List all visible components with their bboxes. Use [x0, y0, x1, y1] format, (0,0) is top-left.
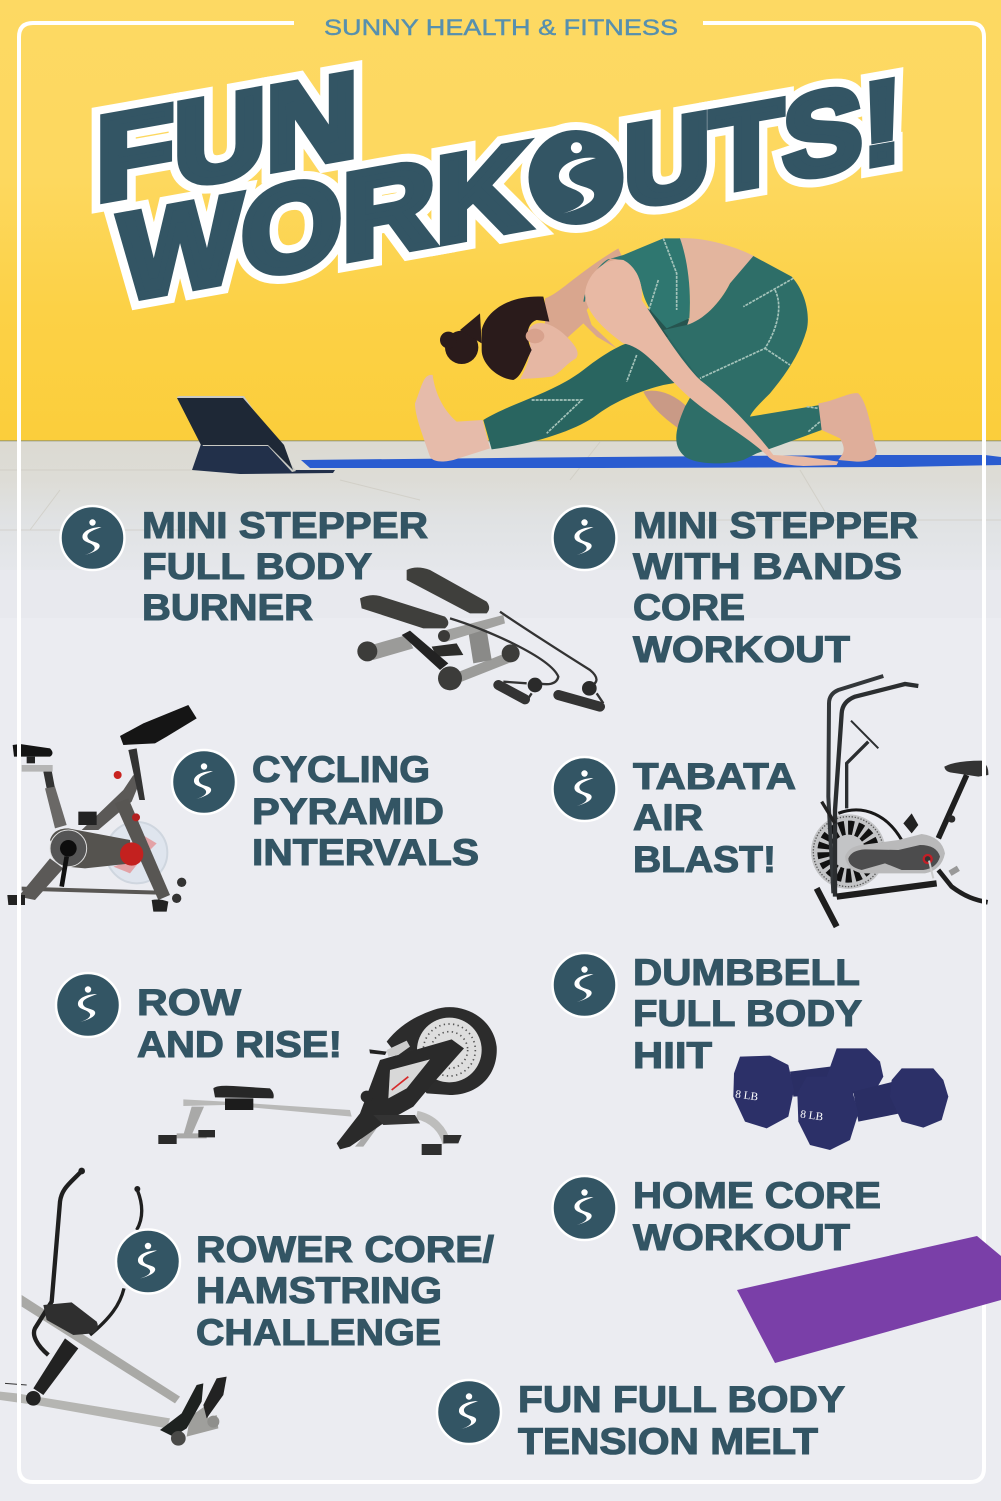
label: PYRAMID — [252, 791, 444, 832]
label: AND RISE! — [137, 1024, 342, 1065]
feet — [7, 895, 25, 905]
item: home core workout — [552, 1175, 881, 1258]
frame — [363, 635, 413, 660]
label: HOME CORE — [633, 1175, 881, 1216]
brand heading: SUNNY HEALTH & FITNESS — [324, 15, 678, 40]
feet — [357, 641, 377, 661]
icon: tablet on stand — [177, 396, 335, 474]
equipment: dumbbells: 8 LB — [799, 1108, 824, 1123]
handles — [828, 676, 883, 893]
icon: logo — [437, 1380, 501, 1444]
title outline — [96, 47, 902, 327]
title: O letter: O — [555, 126, 599, 196]
seams — [532, 238, 820, 433]
seat — [938, 775, 967, 838]
rear leg — [417, 1115, 447, 1143]
label — [137, 982, 342, 1065]
item: cycling pyramid intervals — [172, 749, 479, 873]
bracket — [33, 1338, 78, 1395]
background: stone ground — [0, 440, 1001, 1501]
body cover — [845, 834, 945, 873]
neck and shoulder — [545, 248, 623, 348]
seat — [13, 744, 52, 757]
background: yellow wall — [0, 0, 1001, 441]
label: WORKOUT — [633, 1217, 850, 1258]
fan — [811, 814, 886, 889]
equipment: spin bike — [7, 705, 197, 912]
back foot — [818, 393, 877, 462]
equipment: mini stepper — [357, 567, 603, 707]
hair — [482, 297, 549, 380]
front dumbbell — [853, 1082, 900, 1122]
base bar — [22, 887, 158, 895]
label — [518, 1379, 845, 1462]
flywheel — [106, 822, 167, 883]
front leg — [483, 330, 710, 449]
seat — [213, 1086, 274, 1098]
equipment: hamstring rower — [0, 1168, 227, 1446]
pedals — [407, 567, 489, 613]
label: CHALLENGE — [196, 1312, 441, 1353]
handlebar — [120, 705, 197, 745]
title — [96, 47, 902, 327]
woman stretching — [415, 238, 877, 466]
equipment: rowing machine — [158, 1007, 497, 1155]
title outline: WORK — [119, 118, 529, 327]
bands — [450, 612, 603, 703]
rails — [22, 1295, 180, 1403]
icon: logo — [56, 973, 120, 1037]
item: dumbbell full body hiit — [552, 952, 862, 1076]
equipment: air bike — [811, 676, 988, 927]
item: tabata air blast — [552, 756, 796, 880]
frame — [82, 775, 140, 830]
front foot — [415, 375, 490, 461]
seat post — [43, 771, 55, 788]
icon: logo — [552, 757, 616, 821]
knob — [903, 813, 918, 833]
label: DUMBBELL — [633, 952, 860, 993]
label — [633, 756, 796, 880]
red knobs — [120, 842, 143, 866]
label: WITH BANDS — [633, 546, 902, 587]
arm — [585, 260, 838, 466]
label: TENSION MELT — [518, 1421, 818, 1462]
foot rest — [187, 1405, 218, 1437]
item: row and rise — [56, 973, 342, 1065]
main arm — [337, 1039, 464, 1149]
item: mini stepper with bands core workout — [552, 505, 918, 670]
calf behind — [643, 391, 687, 428]
icon: logo in title — [528, 130, 624, 225]
label — [633, 952, 862, 1076]
ear — [526, 329, 544, 343]
label: BLAST! — [633, 839, 776, 880]
label — [633, 1175, 881, 1258]
title: WORK: WORK — [119, 118, 529, 327]
seat — [43, 1302, 98, 1335]
rail — [183, 1099, 352, 1117]
back dumbbell — [790, 1067, 883, 1097]
label: AIR — [633, 797, 703, 838]
label — [252, 749, 479, 873]
title: FUN: FUN — [96, 47, 358, 227]
label: FULL BODY — [142, 546, 372, 587]
label — [196, 1229, 494, 1353]
base — [817, 883, 937, 927]
label — [633, 505, 918, 670]
label: ROWER CORE/ — [196, 1229, 494, 1270]
hips and bent leg — [663, 256, 822, 463]
label: ROW — [137, 982, 241, 1023]
label: MINI STEPPER — [633, 505, 918, 546]
label: FULL BODY — [633, 993, 862, 1034]
icon: logo — [60, 506, 124, 570]
item: fun full body tension melt — [437, 1379, 845, 1462]
label: CORE — [633, 587, 745, 628]
label: WORKOUT — [633, 629, 850, 670]
shadowed torso — [627, 307, 710, 350]
equipment: purple exercise mat — [737, 1236, 1001, 1363]
title outline: UTS! — [624, 54, 902, 233]
label: TABATA — [633, 756, 796, 797]
icon: logo — [172, 750, 236, 814]
crank — [50, 830, 87, 867]
title outline: FUN — [96, 47, 358, 227]
label: HAMSTRING — [196, 1270, 442, 1311]
back skin — [678, 238, 755, 327]
bun — [440, 313, 482, 364]
title: UTS: UTS! — [624, 54, 902, 233]
icon: logo — [552, 1176, 616, 1240]
flywheel — [387, 1007, 497, 1095]
bra top — [583, 238, 690, 328]
label — [142, 505, 428, 628]
equipment: dumbbells — [733, 1048, 948, 1150]
item: rower core hamstring challenge — [116, 1229, 494, 1353]
item: mini stepper full body burner — [60, 505, 428, 628]
label: INTERVALS — [252, 832, 479, 873]
label: MINI STEPPER — [142, 505, 428, 546]
label: CYCLING — [252, 749, 430, 790]
icon: logo — [552, 506, 616, 570]
label: FUN FULL BODY — [518, 1379, 845, 1420]
face — [520, 323, 578, 379]
handles — [34, 1171, 82, 1355]
equipment: dumbbells: 8 LB — [734, 1088, 759, 1103]
yoga mat — [301, 455, 1001, 468]
icon: logo — [116, 1230, 180, 1294]
label: BURNER — [142, 587, 313, 628]
icon: logo — [552, 953, 616, 1017]
label: HIIT — [633, 1035, 712, 1076]
